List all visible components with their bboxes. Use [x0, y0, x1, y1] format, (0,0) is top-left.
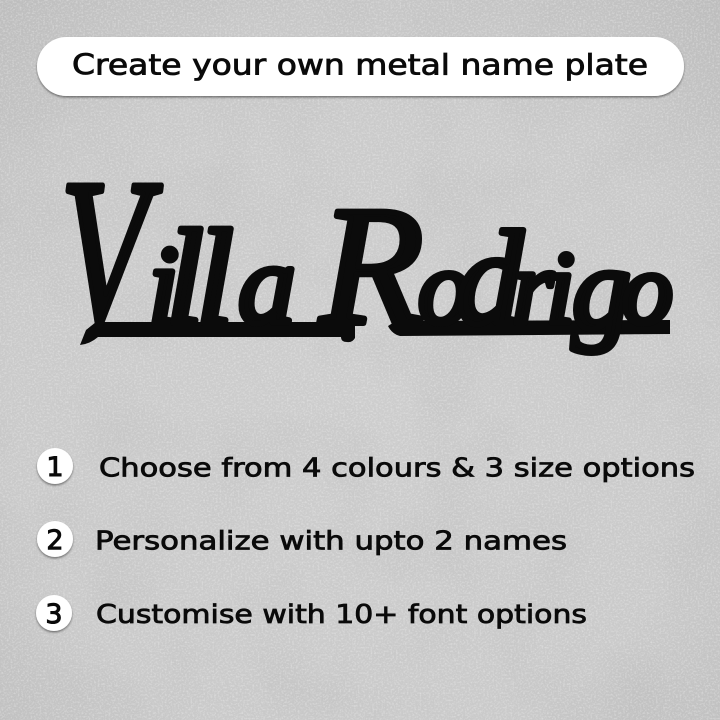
script lettering: g	[572, 223, 631, 354]
badge 3	[36, 595, 72, 631]
script lettering: R	[319, 172, 424, 360]
script lettering: r	[512, 229, 554, 346]
badge 2: 2	[46, 525, 64, 556]
step 1 text: Choose from 4 colours & 3 size options	[99, 454, 695, 484]
script lettering: d	[456, 204, 524, 352]
badge 3: 3	[45, 599, 63, 630]
badge 1	[37, 448, 73, 484]
badge 1: 1	[46, 452, 64, 483]
step 1	[37, 448, 695, 484]
script lettering: V	[60, 137, 162, 369]
step 2	[37, 521, 567, 557]
title text: Create your own metal name plate	[72, 48, 648, 82]
script lettering: o	[418, 229, 471, 346]
script lettering: a	[238, 221, 296, 349]
title pill	[37, 37, 684, 96]
step 3	[36, 595, 587, 631]
step 3 text: Customise with 10+ font options	[96, 600, 587, 630]
script lettering: ll	[166, 203, 234, 353]
metal name plate: Villa Rodrigo	[60, 137, 673, 369]
script lettering: o	[622, 233, 673, 346]
script lettering: i	[546, 231, 575, 346]
underline bar, left word	[80, 322, 355, 345]
step 2 text: Personalize with upto 2 names	[95, 526, 567, 556]
script lettering: i	[148, 224, 179, 348]
underline bar, right word	[388, 320, 670, 336]
badge 2	[37, 521, 73, 557]
